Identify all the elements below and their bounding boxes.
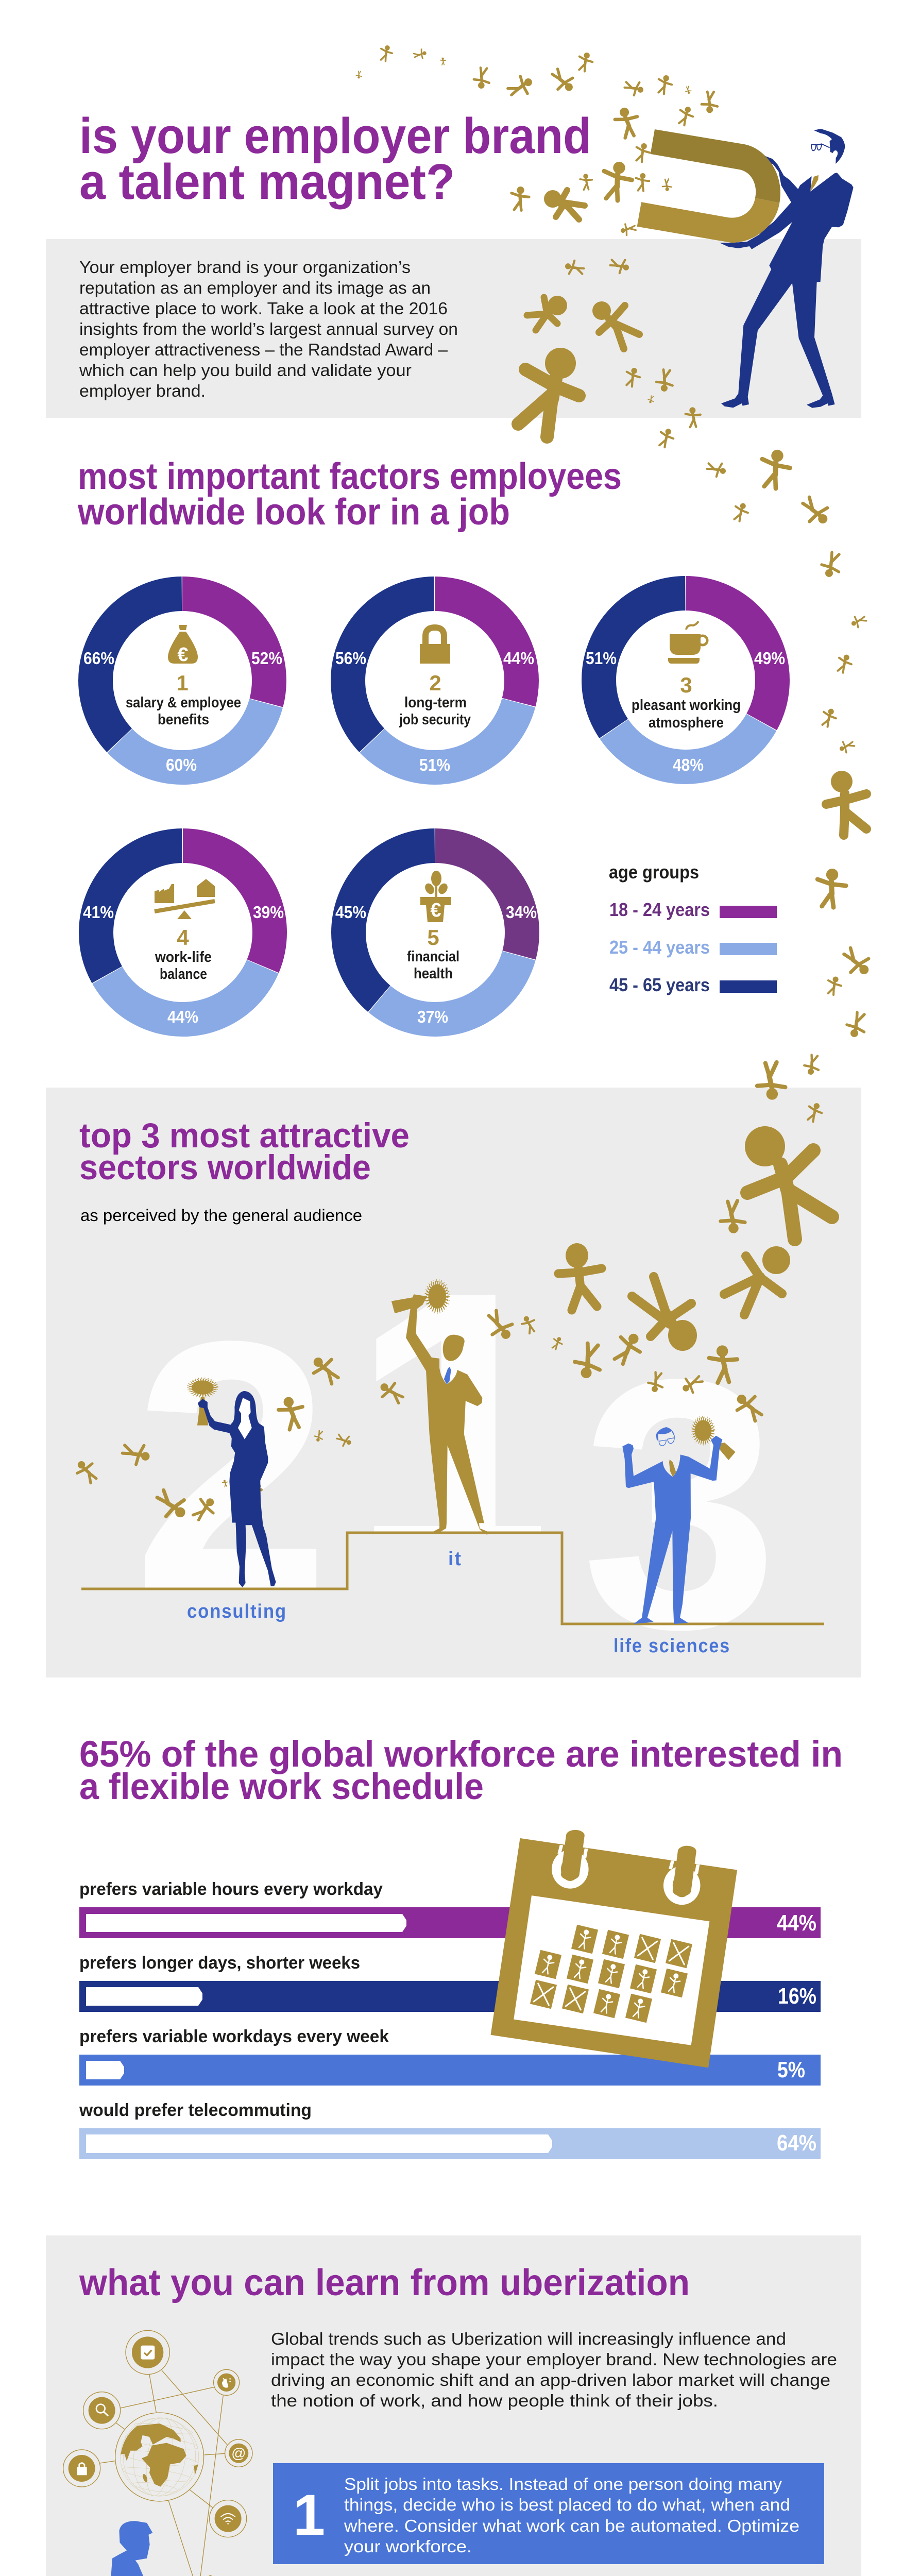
globe <box>115 2413 204 2501</box>
heading: top 3 most attractive sectors: sectors worldwide <box>79 1148 371 1187</box>
title <box>79 108 591 210</box>
legend: age groups: 45 - 65 years <box>609 974 710 995</box>
magnet lower half <box>637 198 779 243</box>
intro text block: reputation as an employer and its image as an <box>79 278 431 297</box>
bar: prefers longer days, shorter weeks <box>79 1953 821 2012</box>
bar: prefers variable workdays every week <box>79 2027 821 2086</box>
man glasses <box>811 144 830 150</box>
donut chart 5: financial health: 5 <box>427 925 439 950</box>
callout box 1: 1 <box>293 2483 325 2547</box>
legend: age groups: age groups <box>609 861 699 883</box>
donut chart 5: financial health: financial <box>407 948 459 965</box>
smartphone <box>178 2575 217 2576</box>
panel: intro background <box>46 239 861 418</box>
icon: search <box>83 2392 121 2429</box>
donut chart 1: salary and employee benefits <box>83 594 282 774</box>
intro text block: which can help you build and validate your <box>79 361 412 380</box>
donut chart 1: salary and employee benefits: 66% <box>83 649 114 668</box>
legend: age groups: 25 - 44 years <box>609 937 710 958</box>
illustration: man with smartphone <box>109 2521 217 2576</box>
man hair <box>814 129 845 164</box>
donut chart 4: work-life balance: work-life <box>155 949 212 965</box>
intro text block <box>79 258 458 400</box>
podium labels: it <box>448 1548 462 1570</box>
bar: would prefer telecommuting <box>79 2100 821 2159</box>
swarm of gold figures: top <box>355 45 719 448</box>
bar percentages <box>777 1910 816 2156</box>
heading: flexible work schedule: 65% of the global workforce are interested in <box>79 1734 843 1775</box>
heading: flexible work schedule <box>79 1734 843 1807</box>
network illustration: globe and icons <box>63 2330 252 2576</box>
illustration: man with trophy (it) <box>391 1280 493 1534</box>
bar percentages: 64% <box>777 2130 816 2156</box>
bar: would prefer telecommuting: would prefer telecommuting <box>79 2100 312 2120</box>
callout box 1: where. Consider what work can be automated. Optimize <box>344 2516 799 2535</box>
large podium numerals: 3 <box>581 1306 779 1703</box>
legend: age groups <box>609 861 777 995</box>
panel: uberization background <box>46 2235 861 2576</box>
illustration: man holding magnet <box>637 129 854 408</box>
bar percentages: 5% <box>777 2057 805 2082</box>
callout box 1: your workforce. <box>344 2537 472 2556</box>
intro text block: Your employer brand is your organization’s <box>79 258 411 277</box>
large podium numerals: 1 <box>349 1210 569 1650</box>
icon: wifi <box>210 2500 247 2537</box>
donut chart 1: salary and employee benefits: 52% <box>251 649 282 668</box>
legend: age groups: 18 - 24 years <box>609 899 710 920</box>
callout box 1: things, decide who is best placed to do what, when and <box>344 2495 790 2514</box>
donut chart 5: financial health: health <box>414 965 453 982</box>
intro text block: employer attractiveness – the Randstad Award – <box>79 340 448 359</box>
heading: top 3 most attractive sectors <box>79 1116 410 1187</box>
swarm of gold figures: right margin <box>707 449 874 1075</box>
podium labels: consulting <box>187 1601 287 1622</box>
donut chart 3: pleasant working atmosphere: 51% <box>586 649 617 668</box>
donut chart 1: salary and employee benefits: 1 <box>176 671 189 695</box>
donut chart 1: salary and employee benefits: 60% <box>166 755 197 774</box>
donut chart 5: financial health: 45% <box>335 903 366 922</box>
donut chart 3: pleasant working atmosphere: 48% <box>673 755 704 774</box>
bar: prefers variable workdays every week: prefers variable workdays every week <box>79 2027 389 2046</box>
donut chart 1: salary and employee benefits: benefits <box>158 711 209 728</box>
podium labels <box>187 1548 730 1657</box>
bar: prefers longer days, shorter weeks: prefers longer days, shorter weeks <box>79 1953 360 1973</box>
donut chart 5: financial health: 37% <box>417 1007 448 1026</box>
donut chart 1: salary and employee benefits: salary & employee <box>126 694 241 711</box>
intro text block: insights from the world’s largest annual survey on <box>79 319 458 338</box>
heading: most important factors <box>77 456 622 533</box>
donut chart 2: long-term job security: long-term <box>404 694 467 711</box>
icon: checkbox <box>126 2330 169 2375</box>
large podium numerals: 2 <box>133 1267 331 1665</box>
bar: prefers variable hours every workday: prefers variable hours every workday <box>79 1879 383 1899</box>
panel: top 3 sectors background <box>46 1088 861 1677</box>
donut chart 4: work-life balance <box>83 846 284 1026</box>
donut chart 2: long-term job security: 44% <box>503 649 534 668</box>
intro text block: attractive place to work. Take a look at the 2016 <box>79 299 448 318</box>
icon: padlock <box>63 2450 100 2487</box>
heading: flexible work schedule: a flexible work schedule <box>79 1767 484 1807</box>
icon: money bag: € <box>177 644 189 666</box>
uberization intro text: driving an economic shift and an app-driven labor market will change <box>271 2370 830 2389</box>
callout box 1: Split jobs into tasks. Instead of one person doing many <box>344 2475 782 2494</box>
heading: most important factors: worldwide look for in a job <box>77 492 510 533</box>
donut chart 4: work-life balance: 44% <box>167 1007 198 1026</box>
intro text block: employer brand. <box>79 381 206 400</box>
donut chart 3: pleasant working atmosphere: 3 <box>680 673 692 697</box>
donut chart 4: work-life balance: 4 <box>177 925 189 950</box>
donut chart 3: pleasant working atmosphere: atmosphere <box>649 715 724 731</box>
bar percentages: 44% <box>777 1910 816 1936</box>
icon: padlock <box>420 628 450 664</box>
icon: touch <box>214 2369 240 2395</box>
uberization intro text: Global trends such as Uberization will increasingly influence and <box>271 2329 786 2348</box>
icon: calendar <box>491 1836 737 2067</box>
donut chart 5: financial health: 34% <box>506 903 537 922</box>
illustration: man with trophy (life sciences) <box>622 1417 736 1624</box>
title: is your employer brand <box>79 108 591 164</box>
bar percentages: 16% <box>778 1984 816 2009</box>
donut chart 4: work-life balance: 41% <box>83 903 114 922</box>
subheading: as perceived by the general audience <box>80 1206 362 1225</box>
donut chart 3: pleasant working atmosphere: 49% <box>754 649 785 668</box>
donut chart 3: pleasant working atmosphere: pleasant working <box>632 697 741 714</box>
uberization intro text: impact the way you shape your employer brand. New technologies are <box>271 2350 837 2369</box>
donut chart 2: long-term job security: 51% <box>419 755 450 774</box>
donut chart 3: pleasant working atmosphere <box>586 594 785 774</box>
donut chart 2: long-term job security: 2 <box>429 671 441 695</box>
icon: plant pot with euro <box>420 871 451 922</box>
large podium numerals <box>133 1210 779 1703</box>
callout box 1 <box>273 2463 824 2564</box>
icon: balance with factory and house <box>155 879 215 919</box>
icon: at sign <box>225 2439 252 2467</box>
heading: top 3 most attractive sectors: top 3 most attractive <box>79 1116 410 1155</box>
heading: what you can learn from uberization: what you can learn from uberization <box>79 2262 690 2303</box>
icon: money bag <box>168 625 198 666</box>
podium steps <box>81 1533 824 1624</box>
man tie <box>810 175 819 192</box>
donut chart 4: work-life balance: 39% <box>253 903 284 922</box>
bar: prefers variable hours every workday <box>79 1879 821 1938</box>
calendar day cells <box>530 1925 692 2023</box>
magnet top half <box>651 129 780 203</box>
icon: plant pot with euro: € <box>430 900 441 921</box>
uberization intro text <box>271 2329 837 2410</box>
podium labels: life sciences <box>614 1635 730 1657</box>
donut chart 4: work-life balance: balance <box>160 966 207 982</box>
icon: at sign: @ <box>231 2445 246 2461</box>
uberization intro text: the notion of work, and how people think of their jobs. <box>271 2391 718 2410</box>
donut chart 5: financial health <box>335 846 537 1026</box>
illustration: woman with trophy (consulting) <box>188 1378 276 1587</box>
man figure <box>720 156 854 408</box>
icon: coffee cup <box>668 621 707 664</box>
title: a talent magnet? <box>79 154 455 210</box>
heading: most important factors: most important factors employees <box>78 456 622 497</box>
swarm of gold figures: sectors panel <box>73 1059 832 1524</box>
donut chart 2: long-term job security: job security <box>399 711 471 728</box>
donut chart 2: long-term job security: 56% <box>335 649 366 668</box>
donut chart 2: long-term job security <box>335 594 534 774</box>
